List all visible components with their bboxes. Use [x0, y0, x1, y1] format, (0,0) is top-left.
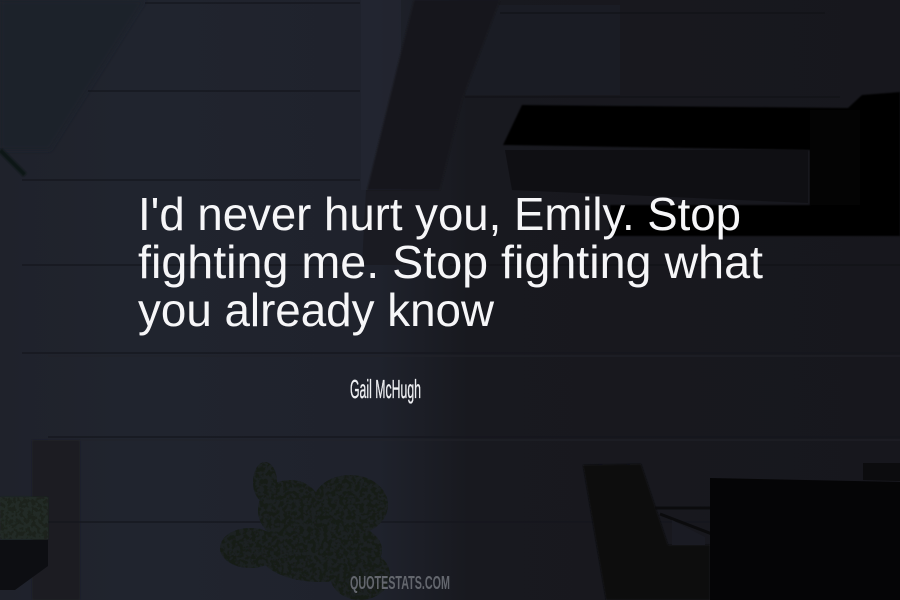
chair silhouette: [583, 464, 712, 600]
quote infographic: Gail McHugh: [350, 374, 421, 404]
dark table: [710, 463, 900, 600]
bush: [220, 462, 390, 600]
quote text: you already know: [138, 284, 495, 336]
dark wall shelf: [503, 92, 900, 236]
left plant and planter: [0, 497, 48, 590]
quote text: fighting me. Stop fighting what: [138, 236, 763, 288]
watermark: QUOTESTATS.COM: [350, 573, 450, 593]
quote text: I'd never hurt you, Emily. Stop: [138, 188, 741, 240]
quote text: [138, 188, 763, 336]
dark diagonal beam: [362, 0, 500, 265]
